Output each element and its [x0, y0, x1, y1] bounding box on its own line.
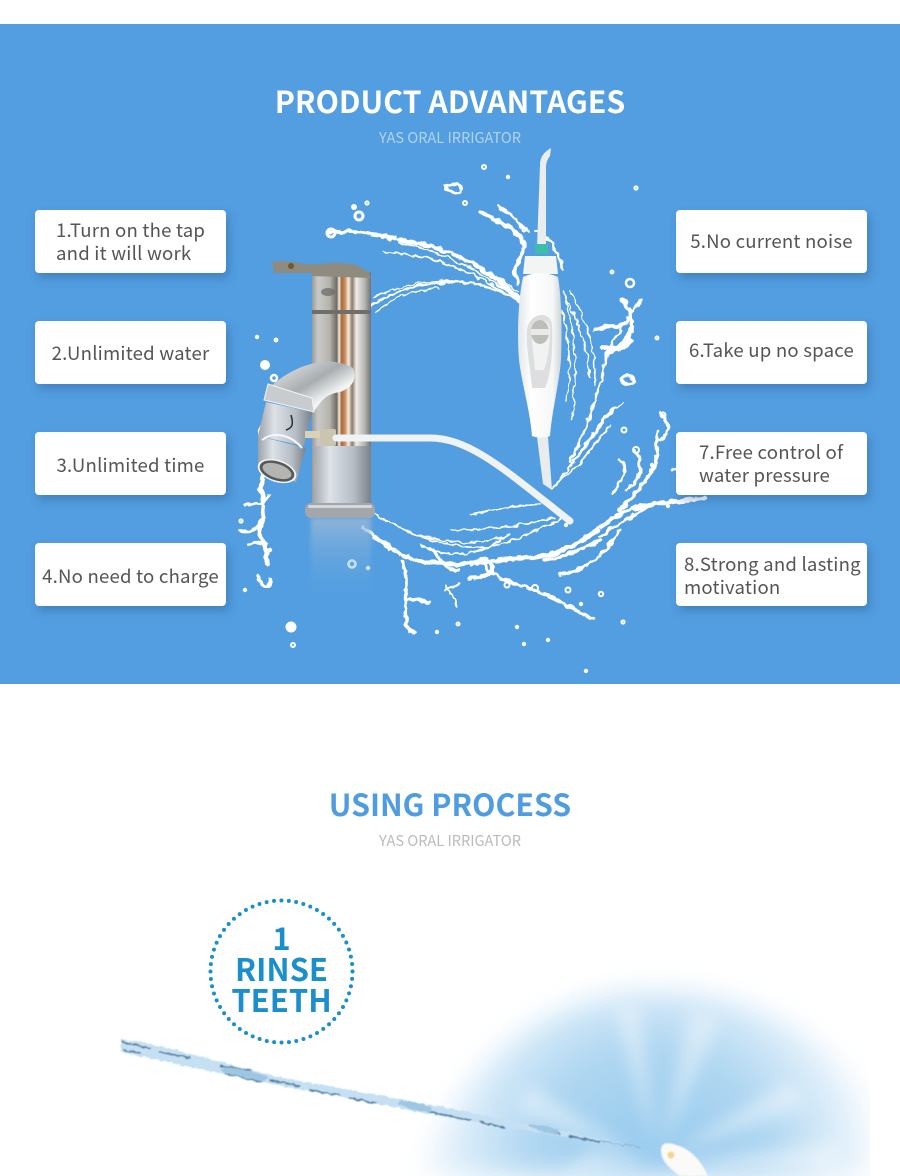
card 3	[35, 432, 226, 495]
card 2: 2.Unlimited water	[52, 338, 209, 366]
card 5: 5.No current noise	[690, 226, 853, 254]
card 7: 7.Free control of	[699, 438, 843, 465]
water glow behind nozzle	[420, 960, 900, 1176]
card 8	[676, 543, 867, 606]
card 1	[35, 210, 226, 273]
nozzle tip	[661, 1143, 708, 1176]
splash: water ring	[240, 184, 705, 633]
step badge text: TEETH	[231, 976, 332, 1021]
step badge text	[231, 914, 332, 1021]
card 4	[35, 543, 226, 606]
card 3: 3.Unlimited time	[56, 450, 205, 478]
faucet	[255, 261, 375, 518]
heading: using process: USING PROCESS	[329, 781, 571, 825]
subheading: product advantages: YAS ORAL IRRIGATOR	[379, 127, 521, 148]
irrigator hose	[336, 438, 570, 521]
heading: product advantages: PRODUCT ADVANTAGES	[275, 78, 625, 122]
faucet: reflection	[311, 518, 371, 606]
card 1: 1.Turn on the tap	[56, 216, 205, 243]
card 1: and it will work	[56, 239, 191, 266]
card 5	[676, 210, 867, 273]
step badge text: 1	[272, 914, 291, 959]
badge ring: dotted circle	[210, 900, 352, 1042]
card 7	[676, 432, 867, 495]
step badge text: RINSE	[235, 945, 328, 990]
card 7: water pressure	[699, 461, 830, 488]
panel: product advantages background	[0, 24, 900, 684]
card 8: motivation	[684, 573, 780, 600]
card 6	[676, 321, 867, 384]
card 2	[35, 321, 226, 384]
water stream	[121, 1039, 642, 1147]
card 4: 4.No need to charge	[42, 562, 219, 588]
subheading: using process: YAS ORAL IRRIGATOR	[379, 830, 521, 851]
card 6: 6.Take up no space	[689, 336, 854, 362]
irrigator handle	[518, 148, 562, 490]
splash: droplets	[239, 165, 692, 672]
card 8: 8.Strong and lasting	[684, 550, 861, 577]
